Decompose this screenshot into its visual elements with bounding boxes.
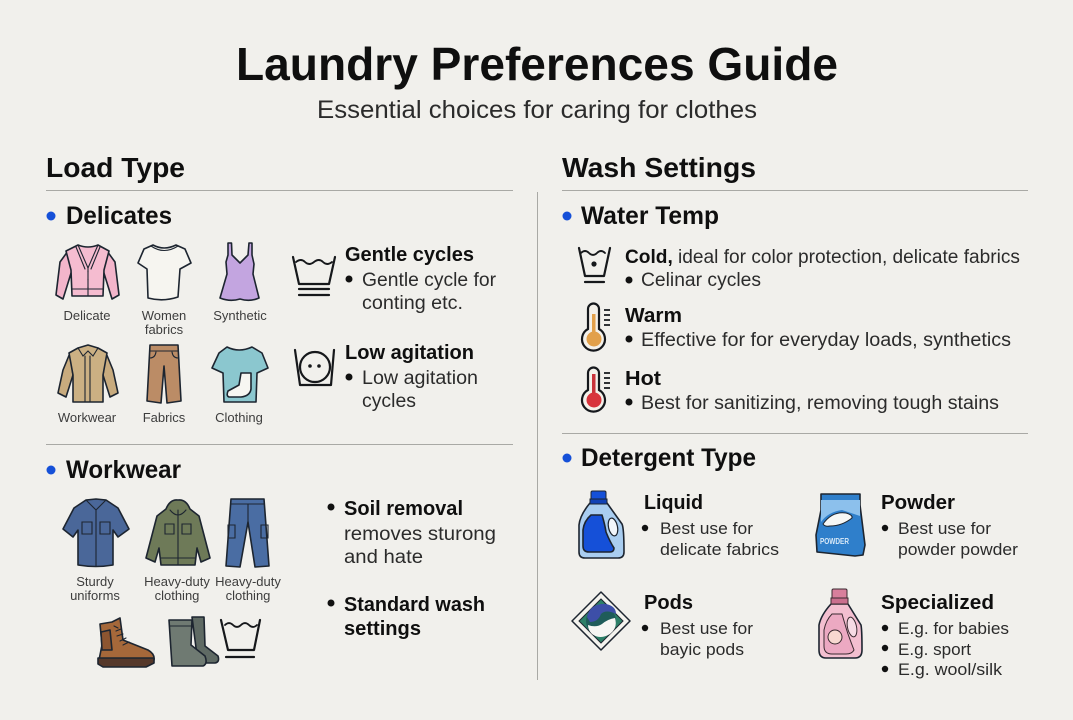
text: pods: Best use for [660, 619, 753, 638]
label: sturdy uniforms [70, 574, 120, 603]
text: hot [625, 368, 999, 414]
text: liquid: Liquid [644, 492, 703, 514]
text: hot: Best for sanitizing, removing tough stains [641, 393, 999, 414]
text: standard wash settings: Standard wash [344, 594, 485, 616]
text: powder: powder powder [898, 540, 1018, 559]
panel: wash settings [562, 152, 1020, 679]
icon: pink cardigan [56, 245, 119, 299]
text: soil removal [328, 498, 496, 568]
icon: brown trousers [147, 345, 181, 403]
icon: low agitation tub [295, 350, 334, 385]
icon: blue short-sleeve shirt [63, 499, 129, 566]
title: Laundry Preferences Guide [236, 38, 838, 90]
text: cold: Celinar cycles [641, 270, 761, 291]
panel: load type [46, 152, 497, 667]
subheading: water temp: Water Temp [581, 202, 719, 230]
text: gentle cycles: Gentle cycle for [362, 270, 497, 291]
label: sturdy uniforms: Sturdy [76, 574, 114, 589]
heading: load type: Load Type [46, 152, 185, 183]
subheading: delicates: Delicates [66, 202, 172, 230]
label: women fabrics [142, 308, 186, 337]
text: cold: Cold, ideal for color protection, delicate fabrics [625, 247, 1020, 268]
text: warm: Effective for for everyday loads, synthetics [641, 330, 1011, 351]
icon: wash tub [221, 620, 260, 657]
text: low agitation: Low agitation [362, 368, 478, 389]
text: soil removal: Soil removal [344, 498, 463, 520]
label: heavy-duty clothing second: Heavy-duty [215, 574, 281, 589]
text: standard wash settings: settings [344, 618, 421, 640]
icon: blue cargo jeans [226, 499, 269, 567]
label: heavy-duty clothing: clothing [155, 588, 199, 603]
icon: tan work shirt [58, 345, 118, 402]
label: heavy-duty clothing: Heavy-duty [144, 574, 210, 589]
label: heavy-duty clothing second [215, 574, 281, 603]
heading: wash settings: Wash Settings [562, 152, 756, 183]
icon: hot thermometer [582, 368, 610, 412]
icon: warm thermometer [582, 304, 610, 351]
label: delicate: Delicate [64, 308, 110, 323]
text: liquid [642, 492, 779, 559]
text: low agitation: Low agitation [345, 342, 474, 364]
text: low agitation [345, 342, 478, 412]
icon: white t-shirt [138, 245, 191, 300]
text: gentle cycles: Gentle cycles [345, 244, 474, 266]
subheading: detergent type: Detergent Type [581, 444, 756, 472]
text: soil removal: and hate [344, 547, 423, 568]
icon: powder box [816, 494, 865, 556]
subtitle: Essential choices for caring for clothes [317, 96, 757, 124]
label: fabrics: Fabrics [143, 410, 186, 425]
subheading: workwear: Workwear [66, 456, 181, 484]
text: liquid: delicate fabrics [660, 540, 779, 559]
icon: detergent pod [572, 592, 630, 650]
text: specialized: E.g. wool/silk [898, 660, 1003, 679]
text: cold [625, 247, 1020, 291]
text: powder: Best use for [898, 519, 991, 538]
text: powder [881, 492, 1018, 559]
text: warm: Warm [625, 305, 682, 327]
text: gentle cycles: conting etc. [362, 293, 463, 314]
text: powder: Powder [881, 492, 955, 514]
text: soil removal: removes sturong [344, 524, 496, 545]
icon: liquid detergent bottle [579, 491, 624, 558]
label: clothing: Clothing [215, 410, 263, 425]
label: heavy-duty clothing [144, 574, 210, 603]
label: women fabrics: Women [142, 308, 186, 323]
icon: gray rubber boots [169, 617, 219, 666]
text: standard wash settings [328, 594, 485, 640]
text: specialized: Specialized [881, 592, 994, 614]
label: synthetic: Synthetic [213, 308, 267, 323]
icon: teal shirt with sock [212, 347, 268, 402]
label: women fabrics: fabrics [145, 322, 184, 337]
icon: specialized pink bottle [819, 589, 862, 658]
icon: purple camisole [220, 243, 259, 300]
icon: green jacket [146, 500, 210, 565]
icon: gentle wash tub [293, 257, 335, 295]
icon: cold wash tub [579, 248, 610, 282]
label: workwear: Workwear [58, 410, 117, 425]
text: specialized: E.g. for babies [898, 619, 1009, 638]
text: pods: bayic pods [660, 640, 744, 659]
text: warm [625, 305, 1011, 351]
icon: brown work boot [98, 618, 154, 667]
text: pods [642, 592, 753, 659]
label: heavy-duty clothing second: clothing [226, 588, 270, 603]
text: pods: Pods [644, 592, 693, 614]
text: hot: Hot [625, 368, 661, 390]
text: gentle cycles [345, 244, 497, 314]
label: sturdy uniforms: uniforms [70, 588, 120, 603]
icon: powder box: POWDER [820, 537, 849, 546]
text: low agitation: cycles [362, 391, 416, 412]
text: specialized [881, 592, 1009, 679]
text: specialized: E.g. sport [898, 640, 971, 659]
text: liquid: Best use for [660, 519, 753, 538]
